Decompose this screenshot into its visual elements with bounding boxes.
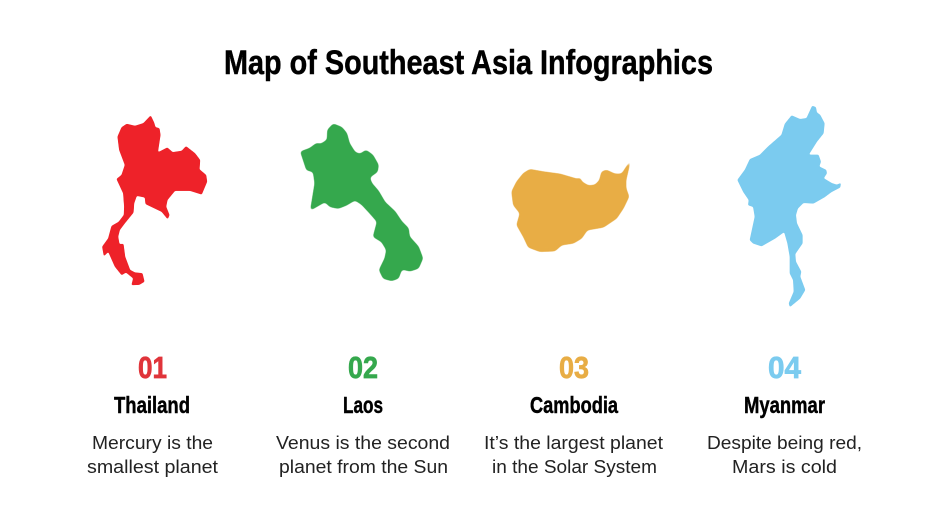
heading: Cambodia: Cambodia bbox=[530, 392, 618, 418]
column: Laos bbox=[276, 350, 450, 477]
column: Cambodia bbox=[484, 350, 663, 477]
map: Laos bbox=[301, 124, 423, 281]
description: Thailand bbox=[87, 433, 218, 477]
description: Laos: planet from the Sun bbox=[279, 457, 448, 477]
description: Myanmar: Mars is cold bbox=[732, 457, 837, 477]
description: Laos: Venus is the second bbox=[276, 433, 450, 453]
column: Myanmar bbox=[707, 350, 862, 477]
heading: Laos: Laos bbox=[343, 392, 383, 418]
number 02: 02 bbox=[348, 350, 378, 385]
title: Map of Southeast Asia Infographics bbox=[224, 44, 713, 82]
map: Thailand bbox=[102, 116, 207, 285]
map: Cambodia bbox=[512, 160, 631, 252]
description: Thailand: Mercury is the bbox=[92, 433, 213, 453]
map: Myanmar bbox=[738, 106, 841, 307]
number 01: 01 bbox=[138, 350, 167, 385]
description: Cambodia bbox=[484, 433, 663, 477]
description: Thailand: smallest planet bbox=[87, 457, 218, 477]
description: Cambodia: It’s the largest planet bbox=[484, 433, 663, 453]
description: Myanmar: Despite being red, bbox=[707, 433, 862, 453]
number 03: 03 bbox=[559, 350, 589, 385]
heading: Myanmar: Myanmar bbox=[744, 392, 825, 418]
heading: Thailand: Thailand bbox=[114, 392, 190, 418]
description: Cambodia: in the Solar System bbox=[492, 457, 657, 477]
column: Thailand bbox=[87, 350, 218, 477]
description: Myanmar bbox=[707, 433, 862, 477]
number 04: 04 bbox=[768, 350, 802, 385]
description: Laos bbox=[276, 433, 450, 477]
